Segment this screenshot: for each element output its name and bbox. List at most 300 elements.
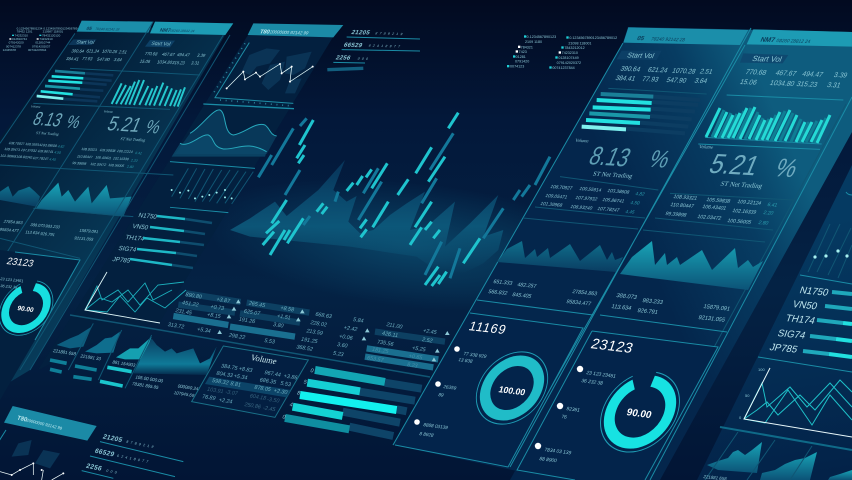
5.21 left xyxy=(103,109,165,142)
5.21 left: % xyxy=(142,116,165,138)
data rows A: 566.832 xyxy=(487,289,508,297)
stats bottom-left: 66529 xyxy=(94,448,115,458)
line chart: 50 xyxy=(745,393,750,398)
donut 90 left xyxy=(0,277,62,339)
stats bottom-left: 2256 xyxy=(85,463,103,473)
data rows A: 845.405 xyxy=(511,292,532,300)
values left B: 770.68 xyxy=(144,51,159,56)
legend items xyxy=(535,366,617,464)
data rows B: 388.073 xyxy=(615,293,638,301)
volume bar labels: 0 xyxy=(281,414,286,421)
list one xyxy=(507,35,556,69)
area chart A xyxy=(497,241,623,272)
left legend xyxy=(0,276,24,290)
list two: 21098 118001 xyxy=(568,41,591,45)
symbol list: JP785 xyxy=(768,342,799,356)
table A: 100.55914 xyxy=(578,186,603,194)
volume table: 804.33 xyxy=(215,371,234,379)
table left B: 102.16339 xyxy=(112,156,130,161)
mini chart captions and bars: 78381 895.85 xyxy=(131,381,160,390)
area left A xyxy=(0,186,40,207)
panel: right lower plane xyxy=(697,165,852,480)
lower data left: 92131.055 xyxy=(74,235,95,242)
panel: left upper plane xyxy=(0,23,233,388)
symbol list: VN50 xyxy=(791,299,819,312)
area chart B xyxy=(620,241,763,290)
start vol label B xyxy=(740,53,788,64)
column 3: 5.84 xyxy=(352,317,364,325)
mini area charts xyxy=(703,432,852,480)
volume bar labels: 0 xyxy=(309,368,314,374)
table A: 4.50 xyxy=(629,200,641,207)
mini chart captions and bars: 881 154903 xyxy=(112,359,137,368)
table left A: 105.86741 xyxy=(37,149,54,154)
panel: left donut 23123: 23123 xyxy=(5,256,36,270)
header left A: 78240 92142 28 xyxy=(95,27,120,31)
table left A: 107.97932 xyxy=(20,148,38,153)
bars xyxy=(582,94,700,133)
mini chart captions and bars: 105.00 000.00 xyxy=(135,374,164,384)
table left B: 110.80447 xyxy=(76,154,93,159)
column 3: +2.42 xyxy=(343,325,358,333)
panel: 23123 xyxy=(510,315,727,480)
stats top middle: 8789219 xyxy=(375,31,405,36)
header B: NM7 xyxy=(759,37,776,44)
column 3 xyxy=(295,312,364,358)
mini chart captions and bars: 221881 33 xyxy=(80,353,102,361)
header left A: 05 xyxy=(85,26,93,32)
column 1: +3.87 xyxy=(215,297,231,305)
table A: 4.82 xyxy=(634,191,646,198)
column 2: 5.53 xyxy=(263,338,276,346)
donut 90 left: 90.00 xyxy=(16,305,35,314)
table B xyxy=(664,194,778,227)
legend list top left: 12345678 xyxy=(3,48,16,52)
line chart: 100 xyxy=(758,367,765,372)
start vol label B: Start Vol xyxy=(751,54,783,64)
volume bar labels xyxy=(281,368,314,421)
volume table: Volume xyxy=(249,352,279,366)
stats top middle: 000 xyxy=(357,57,371,61)
table left A: 108.93240 xyxy=(16,155,33,160)
legend list top left: 00741237844 xyxy=(28,48,47,52)
header left B: NM7 xyxy=(159,28,172,34)
table left B: 109.22124 xyxy=(116,149,134,154)
volume table: 384.75 xyxy=(220,363,238,372)
donut 90 xyxy=(588,367,692,457)
values B: 494.47 xyxy=(801,70,824,79)
table B: 109.22124 xyxy=(736,199,762,207)
volume table: 5.53 xyxy=(279,381,292,388)
volume table: +2.30 xyxy=(273,388,288,396)
list two: 00741237844 xyxy=(552,66,575,70)
column 1: 313.72 xyxy=(167,322,185,331)
legend list top left: 0.12345678901234 xyxy=(17,26,43,30)
legend items: 23 123 23461 xyxy=(585,370,617,380)
table left A xyxy=(0,141,65,162)
line chart xyxy=(739,367,852,437)
legend list top left: 079142020 xyxy=(9,41,24,45)
table A xyxy=(539,184,646,216)
volume table: -3.07 xyxy=(224,389,238,397)
lower data left: 27854.863 xyxy=(3,219,24,225)
volume table: +2.24 xyxy=(218,397,233,405)
legend items xyxy=(414,346,488,439)
legend items: 92361 xyxy=(565,406,581,414)
list two xyxy=(549,36,617,70)
stats bottom-left: 62418977 xyxy=(116,454,151,464)
start vol label: Start Vol xyxy=(626,51,656,60)
bars left A xyxy=(37,71,113,101)
start vol left B xyxy=(145,40,175,47)
legend items: 77 338 929 xyxy=(462,351,488,360)
table left B: 105.59838 xyxy=(99,148,116,153)
volume bar labels: 8 xyxy=(296,390,301,397)
8.13 left: 8.13 xyxy=(30,108,66,131)
lower data left: 926.791 xyxy=(40,231,56,237)
symbol bars xyxy=(803,292,852,357)
column 2: 298.22 xyxy=(228,333,246,341)
header left B: 08260 28812 24 xyxy=(170,29,195,33)
stats bottom-left: 000 xyxy=(106,469,120,475)
table left A: 100.55914 xyxy=(25,142,42,147)
donut 90: 90.00 xyxy=(625,407,653,421)
list one: 01281 xyxy=(516,55,526,59)
header A: 05 xyxy=(636,35,646,42)
8.13 left: Volume xyxy=(30,104,42,109)
legend items: 89 xyxy=(437,392,445,399)
symbol list mid: N1750 xyxy=(137,212,158,221)
table B: 102.16339 xyxy=(731,208,757,216)
panel: left donut 23123 xyxy=(0,250,80,400)
column rules xyxy=(393,28,852,480)
header B: 08260 28812 24 xyxy=(775,38,812,45)
column 1: 231.45 xyxy=(174,308,193,317)
5.21 percent: 5.21 xyxy=(705,148,764,181)
stats top middle: 66529 xyxy=(343,42,364,49)
column 2: 265.45 xyxy=(248,301,266,309)
5.21 left: ST Net Trading xyxy=(120,136,146,142)
donut 100 xyxy=(465,347,559,429)
panel: mid list + line chart xyxy=(70,212,430,377)
symbol list: SIG74 xyxy=(776,328,807,342)
values left B: 1034.80 xyxy=(156,59,174,65)
column 4 xyxy=(366,322,437,370)
data rows B: 983.233 xyxy=(641,298,664,306)
column 2: +1.51 xyxy=(276,313,291,321)
table B: 99.39898 xyxy=(664,211,687,219)
header left A xyxy=(77,21,153,33)
values B: 770.68 xyxy=(744,68,768,77)
values left A: 77.93 xyxy=(81,56,94,61)
8.13 left: % xyxy=(63,112,84,132)
list two: 079142020372 xyxy=(557,61,581,65)
table B: 110.80447 xyxy=(669,202,695,210)
table left A: 101.39968 xyxy=(0,154,17,159)
column 4: 426.11 xyxy=(381,331,399,339)
lower data left: 983.233 xyxy=(45,223,61,229)
legend items: 8888 03139 xyxy=(422,422,449,431)
bar chart left B xyxy=(112,80,185,107)
list one: 7423 xyxy=(519,50,527,54)
legend list top left: 74232310 xyxy=(15,33,28,37)
symbol list: TH174 xyxy=(784,313,817,327)
values left B: 15.06 xyxy=(139,59,152,64)
column rules left xyxy=(0,22,230,370)
value 23123: 23123 xyxy=(589,336,635,357)
start vol label xyxy=(617,51,662,60)
column 1: 451.22 xyxy=(181,300,199,309)
volume table: +8.83 xyxy=(238,366,253,374)
table bands xyxy=(173,293,445,367)
column 4: 211.00 xyxy=(385,322,403,330)
values left B: 467.67 xyxy=(161,52,176,57)
list two: 7843212012 xyxy=(564,46,585,50)
column 4: 735.56 xyxy=(376,339,394,348)
column 3: 191.25 xyxy=(300,337,318,345)
stats bottom-left: 21205 xyxy=(102,434,123,444)
column 4: +0.65 xyxy=(408,353,423,361)
table left B: 100.56005 xyxy=(108,163,125,168)
table left A: 4.50 xyxy=(54,150,62,155)
volume table: +5.34 xyxy=(233,373,248,381)
table left B: 6.41 xyxy=(135,151,143,155)
list two: 0128107449 xyxy=(558,56,579,60)
table A: 109.05471 xyxy=(544,193,569,201)
central glow xyxy=(0,150,852,350)
table A: 4.45 xyxy=(624,209,636,216)
value 11169: 11169 xyxy=(467,318,509,337)
stats top middle xyxy=(327,29,420,70)
table B: 100.56005 xyxy=(726,218,752,226)
data rows B: 926.791 xyxy=(636,308,659,316)
legend list top left: 74232310 xyxy=(39,37,53,41)
panel: column B xyxy=(698,29,852,149)
8.13 percent: ST Net Trading xyxy=(592,171,634,180)
panel: bottom-left repeat xyxy=(0,406,183,480)
values left B: 494.47 xyxy=(176,52,191,57)
symbol list mid xyxy=(111,212,158,265)
data rows A: 95834.477 xyxy=(565,299,592,307)
values: 2.51 xyxy=(699,68,714,76)
values: 3.64 xyxy=(693,78,708,85)
values xyxy=(614,66,714,85)
data rows B xyxy=(610,293,731,324)
values left A: 547.90 xyxy=(96,57,111,62)
legend items: 7834 03 139 xyxy=(543,447,572,456)
stats top middle: 62418977 xyxy=(368,44,403,49)
left legend: 23 123 23461 xyxy=(0,276,24,283)
column 2: +8.58 xyxy=(279,305,295,313)
values left A: 390.64 xyxy=(71,48,86,54)
table A: 101.39968 xyxy=(539,201,564,209)
list one: 784321 xyxy=(521,45,533,49)
header mid: 20000000 92142 99 xyxy=(269,29,310,35)
list two: 0.1234567890123456789012 xyxy=(569,36,617,40)
large area mid xyxy=(133,338,217,375)
list one: 0791420 xyxy=(515,60,529,64)
legend list top left: 012810744 xyxy=(35,41,51,45)
values: 621.24 xyxy=(647,67,669,74)
table A: 103.38608 xyxy=(606,188,631,196)
8.13 left xyxy=(30,104,84,136)
values B: 3.31 xyxy=(826,81,842,90)
table left B: 2.20 xyxy=(130,158,138,163)
line chart: 0 xyxy=(739,415,742,420)
panel: right lower dashboard xyxy=(703,192,852,480)
volume bar labels: 5 xyxy=(303,379,308,386)
table B: 102.03472 xyxy=(696,214,722,222)
table left B: 106.43401 xyxy=(95,155,112,160)
stats top middle: 21205 xyxy=(350,29,371,36)
volume table: 598.32 xyxy=(211,378,229,387)
column 4: 181.25 xyxy=(371,347,389,355)
table left A: 109.05471 xyxy=(4,147,21,152)
5.21 left: 5.21 xyxy=(104,113,145,137)
wave chart xyxy=(172,110,277,157)
volume table: -3.50 xyxy=(266,397,280,405)
legend list top left xyxy=(3,26,78,52)
table B: 2.20 xyxy=(762,210,774,217)
panel: left column B xyxy=(0,22,233,370)
table left B: 108.93321 xyxy=(81,147,98,152)
8.13 percent xyxy=(574,138,675,180)
chart area silhouette xyxy=(230,160,503,280)
column 4: 8.23 xyxy=(406,362,418,370)
5.21 left: Volume xyxy=(103,109,114,114)
list one: 0.1234567890123 xyxy=(527,35,556,39)
column 2 xyxy=(228,301,295,346)
mini chart captions and bars: 221881 658 xyxy=(52,348,77,356)
values B: 1034.80 xyxy=(769,79,796,88)
legend list top left: 007412378 xyxy=(6,44,21,48)
values: 1070.28 xyxy=(671,68,697,76)
column 1 xyxy=(167,292,231,335)
symbol list mid: TH174 xyxy=(124,234,146,243)
values: 384.41 xyxy=(614,75,637,83)
panel: mid column plane xyxy=(38,35,333,370)
symbol list mid: SIG74 xyxy=(117,245,138,254)
legend list top right xyxy=(507,35,617,70)
start vol left: Start Vol xyxy=(75,39,95,46)
market table xyxy=(167,292,450,370)
column 3: 213.59 xyxy=(305,328,324,337)
volume table: 686.35 xyxy=(259,377,277,386)
header bottom-left: 20000000 92142 99 xyxy=(26,418,64,431)
donut 100: 100.00 xyxy=(497,384,527,397)
table B: 105.59838 xyxy=(705,197,731,205)
values left A: 384.41 xyxy=(65,56,80,61)
table left B: 102.03472 xyxy=(90,162,107,167)
data rows B: 15879.091 xyxy=(702,304,731,313)
stats bottom-left: 8789219 xyxy=(126,440,156,449)
legend items: 26359 xyxy=(442,384,457,392)
values B: 315.23 xyxy=(795,80,819,89)
column 4: 2.52 xyxy=(421,337,433,345)
column 1: 890.80 xyxy=(184,292,203,301)
8.13 percent: % xyxy=(645,145,675,173)
legend items: 76 xyxy=(560,414,568,421)
values B xyxy=(739,68,849,90)
5.21 percent xyxy=(698,145,802,190)
values left A: 621.24 xyxy=(86,48,101,54)
5.21 percent: Volume xyxy=(698,145,714,151)
column 3: 3.60 xyxy=(336,342,348,350)
values B: 3.39 xyxy=(833,71,849,80)
list one: 0074123 xyxy=(510,65,524,69)
table B: 106.43401 xyxy=(701,204,727,212)
values left A xyxy=(65,48,128,62)
list one: 2109 1180 xyxy=(525,40,542,44)
table left B: 2.80 xyxy=(126,165,134,169)
table B: 2.80 xyxy=(757,220,769,227)
line chart mid xyxy=(70,272,430,377)
column 3: 5.23 xyxy=(332,351,344,358)
values left B: 3.31 xyxy=(190,60,201,66)
legend list top left: 210987 118001 xyxy=(43,30,64,34)
table B: 108.93321 xyxy=(672,194,698,202)
table A: 105.86741 xyxy=(601,197,626,205)
start vol left B: Start Vol xyxy=(150,41,171,47)
volume table: -2.45 xyxy=(262,405,276,413)
column 2: 625.07 xyxy=(243,309,261,317)
panel: column A xyxy=(560,27,793,200)
start vol left xyxy=(68,39,97,46)
table left A: 4.45 xyxy=(49,157,57,162)
panel: right main plane xyxy=(393,27,852,480)
candlestick chart xyxy=(230,113,550,286)
table left A: 103.38608 xyxy=(40,143,58,148)
column 3: 368.52 xyxy=(295,344,314,353)
panel: mid column xyxy=(170,23,343,213)
table left B xyxy=(72,147,143,169)
volume table: +3.86 xyxy=(283,373,298,381)
values left A: 1070.28 xyxy=(101,49,119,54)
values: 390.64 xyxy=(619,66,642,73)
column 3: 668.63 xyxy=(314,312,333,320)
symbol bars mid xyxy=(130,216,212,268)
values left A: 3.64 xyxy=(113,57,123,62)
mini chart captions and bars: 000060.34 xyxy=(177,383,200,391)
values: 547.90 xyxy=(665,77,688,85)
panel: left column A xyxy=(0,21,153,207)
symbol list: N1750 xyxy=(798,285,830,299)
lower data left: 113.634 xyxy=(25,229,41,235)
volume bar labels: 4 xyxy=(289,402,294,408)
volume table xyxy=(192,346,308,417)
values left B xyxy=(139,51,207,66)
5.21 percent: % xyxy=(771,154,802,183)
volume bars xyxy=(285,370,422,436)
legend items: 13 838 xyxy=(457,357,474,365)
header A: 78240 92142 28 xyxy=(650,36,686,43)
data rows B: 92131.055 xyxy=(697,315,726,324)
table left A: 4.82 xyxy=(57,144,65,149)
column 4: 653.57 xyxy=(366,355,384,364)
left legend: 36 232 38 xyxy=(0,283,18,290)
volume table: 967.44 xyxy=(263,370,282,379)
column 1: +0.73 xyxy=(209,304,225,312)
header left B xyxy=(150,22,233,35)
column 2: 3.80 xyxy=(272,322,284,330)
bright candles xyxy=(263,113,480,286)
data rows A xyxy=(487,279,598,307)
area left B xyxy=(36,183,132,217)
header mid xyxy=(248,23,343,37)
8.13 percent: 8.13 xyxy=(585,142,635,173)
lower data left: 15879.091 xyxy=(79,228,100,234)
data rows A: 482.257 xyxy=(516,282,537,290)
